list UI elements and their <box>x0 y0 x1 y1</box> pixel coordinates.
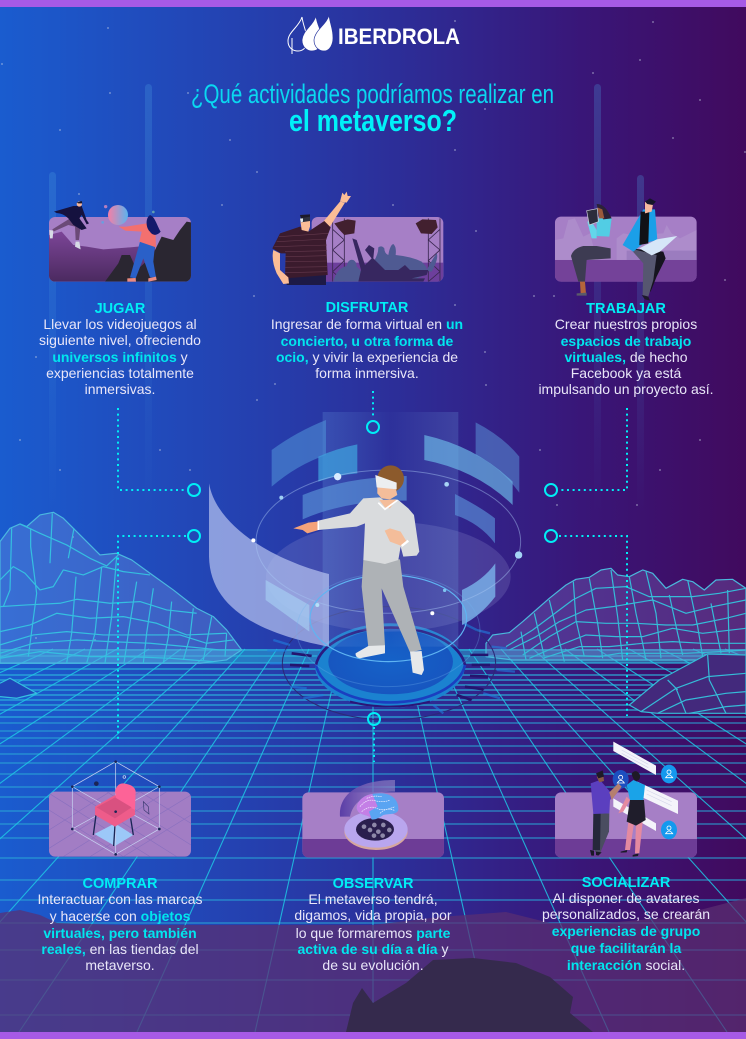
orbit rings <box>256 470 521 687</box>
text block: trabajar: Facebook ya está <box>571 365 681 381</box>
text block: disfrutar: concierto, u otra forma de <box>281 333 454 349</box>
text block: comprar: metaverso. <box>85 957 155 973</box>
text block: socializar: interacción social. <box>567 957 685 973</box>
text block: socializar: experiencias de grupo <box>552 923 700 939</box>
holographic panels <box>209 412 519 647</box>
text block: trabajar: impulsando un proyecto así. <box>538 381 714 397</box>
top band <box>0 0 746 7</box>
left wireframe mountain <box>0 512 242 698</box>
icon: three drops <box>288 15 333 54</box>
bottom band <box>0 1032 746 1039</box>
illustration: jugar <box>49 201 191 282</box>
text block: trabajar <box>538 301 714 397</box>
text block: trabajar: TRABAJAR <box>586 301 666 317</box>
connector: socializar <box>545 530 627 716</box>
connector: trabajar <box>545 408 627 496</box>
illustration: comprar <box>49 760 191 857</box>
logo <box>288 15 460 54</box>
title: ¿Qué actividades podríamos realizar en <box>191 79 554 109</box>
light beams <box>49 84 644 515</box>
text block: disfrutar: ocio, y vivir la experiencia de <box>276 349 458 365</box>
text block: comprar: COMPRAR <box>83 876 158 892</box>
right wireframe mountain <box>486 568 746 713</box>
person in VR <box>293 465 424 675</box>
illustration: observar <box>302 780 444 859</box>
orbit dots <box>251 473 522 615</box>
text block: jugar: JUGAR <box>95 301 146 317</box>
title: el metaverso? <box>289 103 457 138</box>
text block: disfrutar <box>271 300 463 381</box>
connector: disfrutar <box>367 391 379 433</box>
text block: observar: activa de su día a día y <box>298 941 448 957</box>
text block: socializar <box>542 875 710 973</box>
title <box>191 79 554 138</box>
central hologram and figure <box>209 412 522 720</box>
logo wordmark: IBERDROLA <box>338 24 460 49</box>
text block: observar: OBSERVAR <box>333 876 414 892</box>
text block: socializar: SOCIALIZAR <box>582 875 671 891</box>
connector: jugar <box>118 408 200 496</box>
text block: comprar: virtuales, pero también <box>43 925 197 941</box>
text block: socializar: personalizados, se crearán <box>542 906 710 922</box>
text block: comprar: reales, en las tiendas del <box>41 941 199 957</box>
text block: jugar: experiencias totalmente <box>46 365 194 381</box>
text block: socializar: Al disponer de avatares <box>552 890 700 906</box>
text block: observar: de su evolución. <box>322 957 424 973</box>
text block: jugar: siguiente nivel, ofreciendo <box>39 332 201 348</box>
text block: trabajar: Crear nuestros propios <box>555 316 697 332</box>
text block: jugar: Llevar los videojuegos al <box>43 316 197 332</box>
text block: observar: digamos, vida propia, por <box>294 907 452 923</box>
text block: socializar: que facilitarán la <box>571 940 681 956</box>
text block: jugar: inmersivas. <box>85 381 155 397</box>
connector: comprar <box>118 530 200 740</box>
floor grid <box>0 649 746 1032</box>
text block: comprar: y hacerse con objetos <box>50 908 190 924</box>
text block: observar: El metaverso tendrá, <box>308 891 438 907</box>
text block: observar <box>294 876 452 973</box>
platform <box>267 607 515 720</box>
text block: trabajar: espacios de trabajo <box>561 333 691 349</box>
text block: disfrutar: DISFRUTAR <box>326 300 409 316</box>
text block: comprar <box>38 876 202 973</box>
stars <box>1 20 746 641</box>
illustration: disfrutar <box>272 192 443 285</box>
text block: trabajar: virtuales, de hecho <box>565 349 687 365</box>
text block: observar: lo que formaremos parte <box>296 925 450 941</box>
text block: comprar: Interactuar con las marcas <box>38 891 202 907</box>
text block: disfrutar: forma inmersiva. <box>315 365 419 381</box>
illustration: socializar <box>555 742 697 859</box>
text block: jugar <box>39 301 201 397</box>
connector: observar <box>368 713 380 762</box>
background dark hills <box>0 898 746 1032</box>
text block: jugar: universos infinitos y <box>52 349 188 365</box>
illustration: trabajar <box>555 198 697 301</box>
text block: disfrutar: Ingresar de forma virtual en un <box>271 316 463 332</box>
